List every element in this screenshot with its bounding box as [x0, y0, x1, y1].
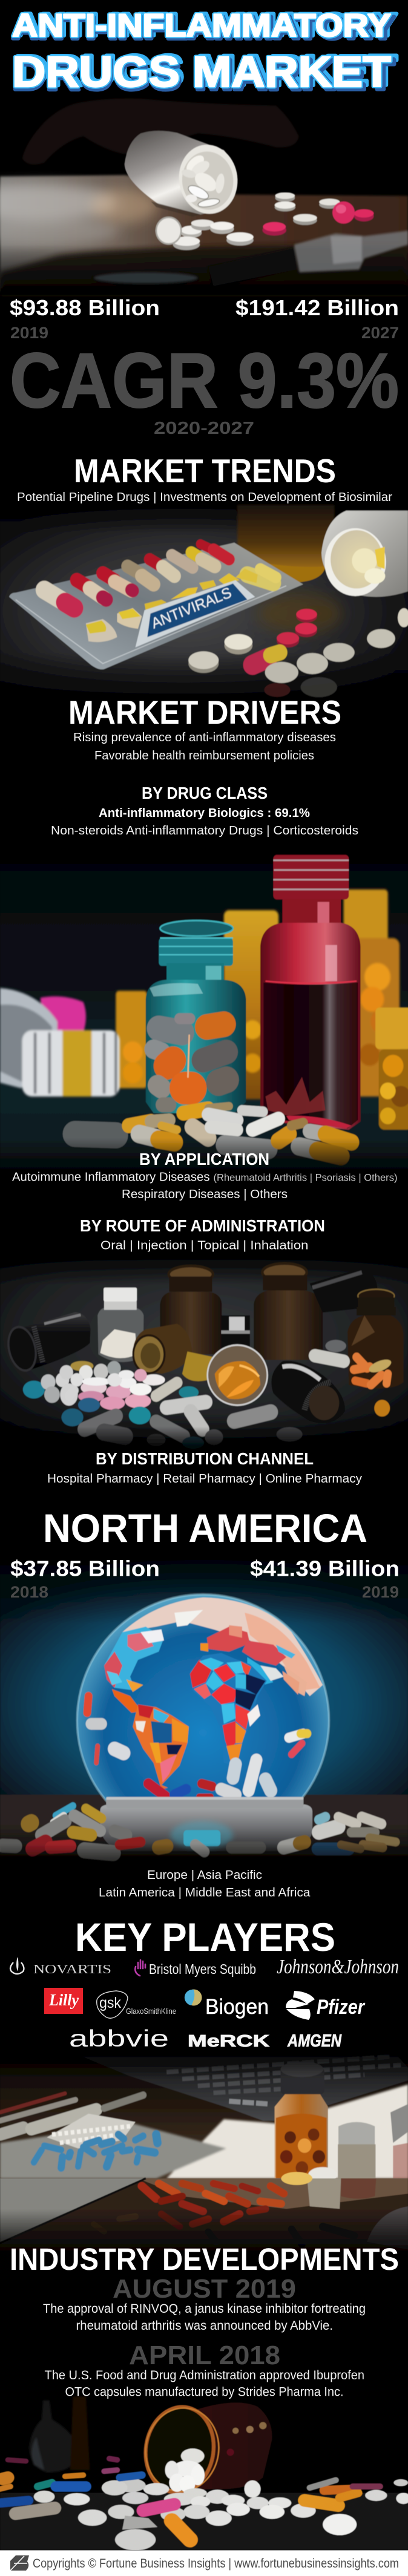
white bottle: [125, 131, 243, 220]
white bottle with pink cap: [0, 988, 120, 1096]
syringe: [94, 231, 408, 286]
asia: [242, 1640, 299, 1695]
south america: [133, 1705, 189, 1789]
text block: August 2019 development: AUGUST 2019: [113, 2274, 296, 2304]
dark surface: [0, 500, 408, 703]
other regions: Latin America | Middle East and Africa: [99, 1886, 311, 1899]
icon: Fortune Business Insights logo: [10, 2555, 29, 2571]
stat: 2019 market size: [10, 295, 160, 342]
photo: blister pack and tablets: [0, 500, 408, 703]
photo: teal and red medicine bottles: [0, 849, 408, 1177]
text block: August 2019 development: [43, 2274, 366, 2333]
stat: north america 2018: 2018: [10, 1583, 48, 1601]
title line 2: DRUGS MARKET: [15, 47, 397, 95]
polar and asian land: [122, 1598, 323, 1696]
segment: by distribution channel: BY DISTRIBUTION CHANNEL: [96, 1449, 314, 1468]
blue capsules: [34, 2134, 157, 2168]
coloured capsules: [0, 2459, 380, 2540]
glass rim: [77, 1594, 329, 1846]
ANTIVIRALS label: ANTIVIRALS: [149, 584, 234, 632]
brown glass bottles in back: [160, 1263, 403, 1388]
pills inside globe: [87, 1696, 307, 1797]
segment: by distribution channel: [47, 1449, 362, 1486]
segment: by drug class: BY DRUG CLASS: [142, 784, 268, 802]
logo: Lilly: [44, 1988, 83, 2014]
pink, white and teal pills: [23, 1361, 199, 1426]
segment: by application: Autoimmune Inflammatory Diseases: [12, 1170, 209, 1184]
heading: key players: KEY PLAYERS: [75, 1915, 335, 1959]
capsules in blister: [44, 544, 276, 608]
footer bar: [0, 2550, 408, 2576]
amber jar on its side: [133, 1324, 214, 1381]
ANTIVIRALS label: [136, 580, 255, 647]
black bottle front: [271, 1361, 345, 1423]
heading: market trends: [17, 452, 392, 504]
segment: by application: BY APPLICATION: [139, 1150, 269, 1168]
white capsules: [69, 1383, 303, 1449]
stat: CAGR: 2020-2027: [154, 419, 254, 438]
heading: market trends: Potential Pipeline Drugs | Investments on Development of Biosimilar: [17, 491, 392, 504]
backdrop: [0, 849, 408, 1177]
blurred amber bottles: [116, 890, 400, 1100]
logo: Novartis: NOVARTIS: [33, 1962, 111, 1976]
segment: by drug class: Non-steroids Anti-inflammatory Drugs | Corticosteroids: [51, 824, 358, 837]
pens and vials: [0, 2094, 143, 2134]
title: [12, 7, 397, 99]
clear jar with orange capsules: [208, 1316, 268, 1405]
heading: market drivers: Favorable health reimbursement policies: [94, 749, 314, 762]
stat: north america 2018: $37.85 Billion: [10, 1556, 160, 1581]
yellow blister pockets: [86, 568, 258, 642]
text block: August 2019 development: The approval of RINVOQ, a janus kinase inhibitor fortreating: [43, 2302, 366, 2316]
logo: Bristol Myers Squibb: Bristol Myers Squibb: [149, 1961, 256, 1977]
logo: Pfizer: [286, 1991, 366, 2020]
stat: north america 2019: [250, 1556, 400, 1601]
photo: open bottles and scattered pills: [0, 1254, 408, 1460]
logo: Biogen: Biogen: [205, 1995, 269, 2019]
logo: GSK: gsk: [99, 1994, 121, 2011]
white tablets: [156, 192, 340, 250]
pill pile right: [284, 1817, 396, 1849]
grey bottles: [308, 2104, 408, 2183]
photo: spilled pill bottle on table: [0, 99, 408, 295]
stat: 2019 market size: 2019: [10, 324, 48, 342]
title line 2: DRUGS MARKET: [12, 48, 391, 96]
stat: 2027 market size: $191.42 Billion: [235, 295, 399, 320]
title line 1: ANTI-INFLAMMATORY: [12, 8, 391, 44]
dark bottle on its side: [4, 1312, 91, 1374]
text block: April 2018 development: The U.S. Food and Drug Administration approved Ibuprofen: [45, 2368, 364, 2382]
logo: Novartis: [10, 1958, 111, 1976]
north america: [104, 1627, 164, 1712]
segment: by drug class: [51, 784, 358, 837]
white beads: [47, 2114, 136, 2148]
text block: April 2018 development: OTC capsules manufactured by Strides Pharma Inc.: [65, 2385, 344, 2399]
blister pack: [9, 543, 303, 669]
white bottle on its side: [321, 511, 408, 597]
text block: August 2019 development: rheumatoid arthritis was announced by AbbVie.: [76, 2319, 333, 2333]
pink tablets: [262, 202, 373, 235]
heading: market drivers: MARKET DRIVERS: [68, 693, 341, 731]
title line 1: ANTI-INFLAMMATORY: [15, 7, 397, 43]
stat: north america 2019: 2019: [362, 1583, 399, 1601]
wooden table: [0, 175, 408, 295]
fade into black: [0, 2209, 408, 2257]
photo: capsules and papers on desk: [0, 2172, 408, 2257]
logo: Biogen: [185, 1990, 269, 2019]
surface: [0, 2493, 408, 2551]
photo: orange bottle spilling white tablets: [0, 2396, 408, 2551]
blue backdrop: [0, 1546, 408, 1799]
segment: by application: [12, 1150, 397, 1201]
stat: 2027 market size: [235, 295, 399, 342]
segment: by application: (Rheumatoid Arthritis | Psoriasis | Others): [213, 1173, 397, 1184]
desk base: [0, 2172, 408, 2252]
amber jar: [275, 2062, 328, 2178]
other regions: [99, 1869, 311, 1899]
red bottle: [260, 855, 361, 1130]
logo: Merck: MeRCK: [188, 2031, 269, 2050]
stat: 2019 market size: $93.88 Billion: [10, 295, 160, 320]
teal bottle: [146, 920, 246, 1113]
glass sphere: [77, 1594, 329, 1846]
segment: by route of administration: [80, 1216, 325, 1253]
red capsule cluster: [94, 2183, 354, 2244]
pills inside teal bottle: [154, 1018, 226, 1105]
hand reaching for the bottle: [22, 99, 299, 165]
orange pills in right bottle: [315, 1340, 393, 1417]
fade: [0, 1138, 408, 1177]
right amber jar: [375, 1008, 408, 1130]
segment: by route of administration: BY ROUTE OF ADMINISTRATION: [80, 1216, 325, 1235]
logo: Pfizer: Pfizer: [317, 1996, 366, 2019]
tablets and capsule: [188, 608, 408, 697]
stat: north america 2019: $41.39 Billion: [250, 1556, 400, 1581]
surface: [0, 1254, 408, 1460]
dark flask: [29, 2396, 90, 2473]
photo: desk with keyboard and medicine: [0, 2046, 408, 2183]
stat: 2027 market size: 2027: [361, 324, 399, 342]
heading: north america: NORTH AMERICA: [43, 1506, 367, 1550]
logo: GSK: GlaxoSmithKline: [126, 2007, 176, 2016]
segment: by distribution channel: Hospital Pharmacy | Retail Pharmacy | Online Pharmacy: [47, 1472, 362, 1486]
title line 2: DRUGS MARKET: [12, 48, 391, 96]
logo: Amgen: AMGEN: [287, 2031, 342, 2051]
heading: market trends: MARKET TRENDS: [74, 452, 336, 490]
logo: AbbVie: abbvie: [69, 2026, 169, 2052]
africa map: [190, 1653, 267, 1766]
stat: north america 2018: [10, 1556, 160, 1601]
photo: globe filled with pills: [0, 1546, 408, 1874]
logos: key players: [10, 1956, 399, 2052]
segment: by application: Respiratory Diseases | Others: [122, 1188, 288, 1201]
keyboard: [62, 2048, 408, 2121]
white tablets spilling: [34, 2448, 408, 2551]
fade: [0, 1426, 408, 1452]
title line 2: DRUGS MARKET: [12, 51, 395, 99]
segment: by drug class: Anti-inflammatory Biologics : 69.1%: [99, 807, 310, 820]
pill pile left: [2, 1806, 260, 1853]
capsule pile: [75, 1106, 352, 1156]
fade: [0, 1843, 408, 1874]
europe: [200, 1625, 250, 1651]
amber glass: [237, 505, 341, 633]
table under the globe: [0, 1795, 408, 1869]
text block: April 2018 development: APRIL 2018: [129, 2341, 280, 2370]
heading: market drivers: Rising prevalence of anti-inflammatory diseases: [73, 731, 336, 744]
clear jar with white pills: [97, 1288, 143, 1362]
text block: April 2018 development: [45, 2341, 364, 2399]
other regions: Europe | Asia Pacific: [147, 1869, 262, 1882]
title line 1: ANTI-INFLAMMATORY: [12, 8, 391, 44]
silver base: [100, 1797, 312, 1851]
title line 1: ANTI-INFLAMMATORY: [12, 10, 395, 46]
desk: [0, 2048, 408, 2179]
segment: by route of administration: Oral | Injection | Topical | Inhalation: [100, 1239, 309, 1253]
bright paper: [0, 2085, 408, 2178]
logo: Lilly: Lilly: [48, 1991, 79, 2009]
logo: GSK: [97, 1991, 176, 2018]
heading: market drivers: [68, 693, 341, 762]
orange bottle: [140, 2402, 272, 2497]
fade at top: [0, 2046, 408, 2079]
